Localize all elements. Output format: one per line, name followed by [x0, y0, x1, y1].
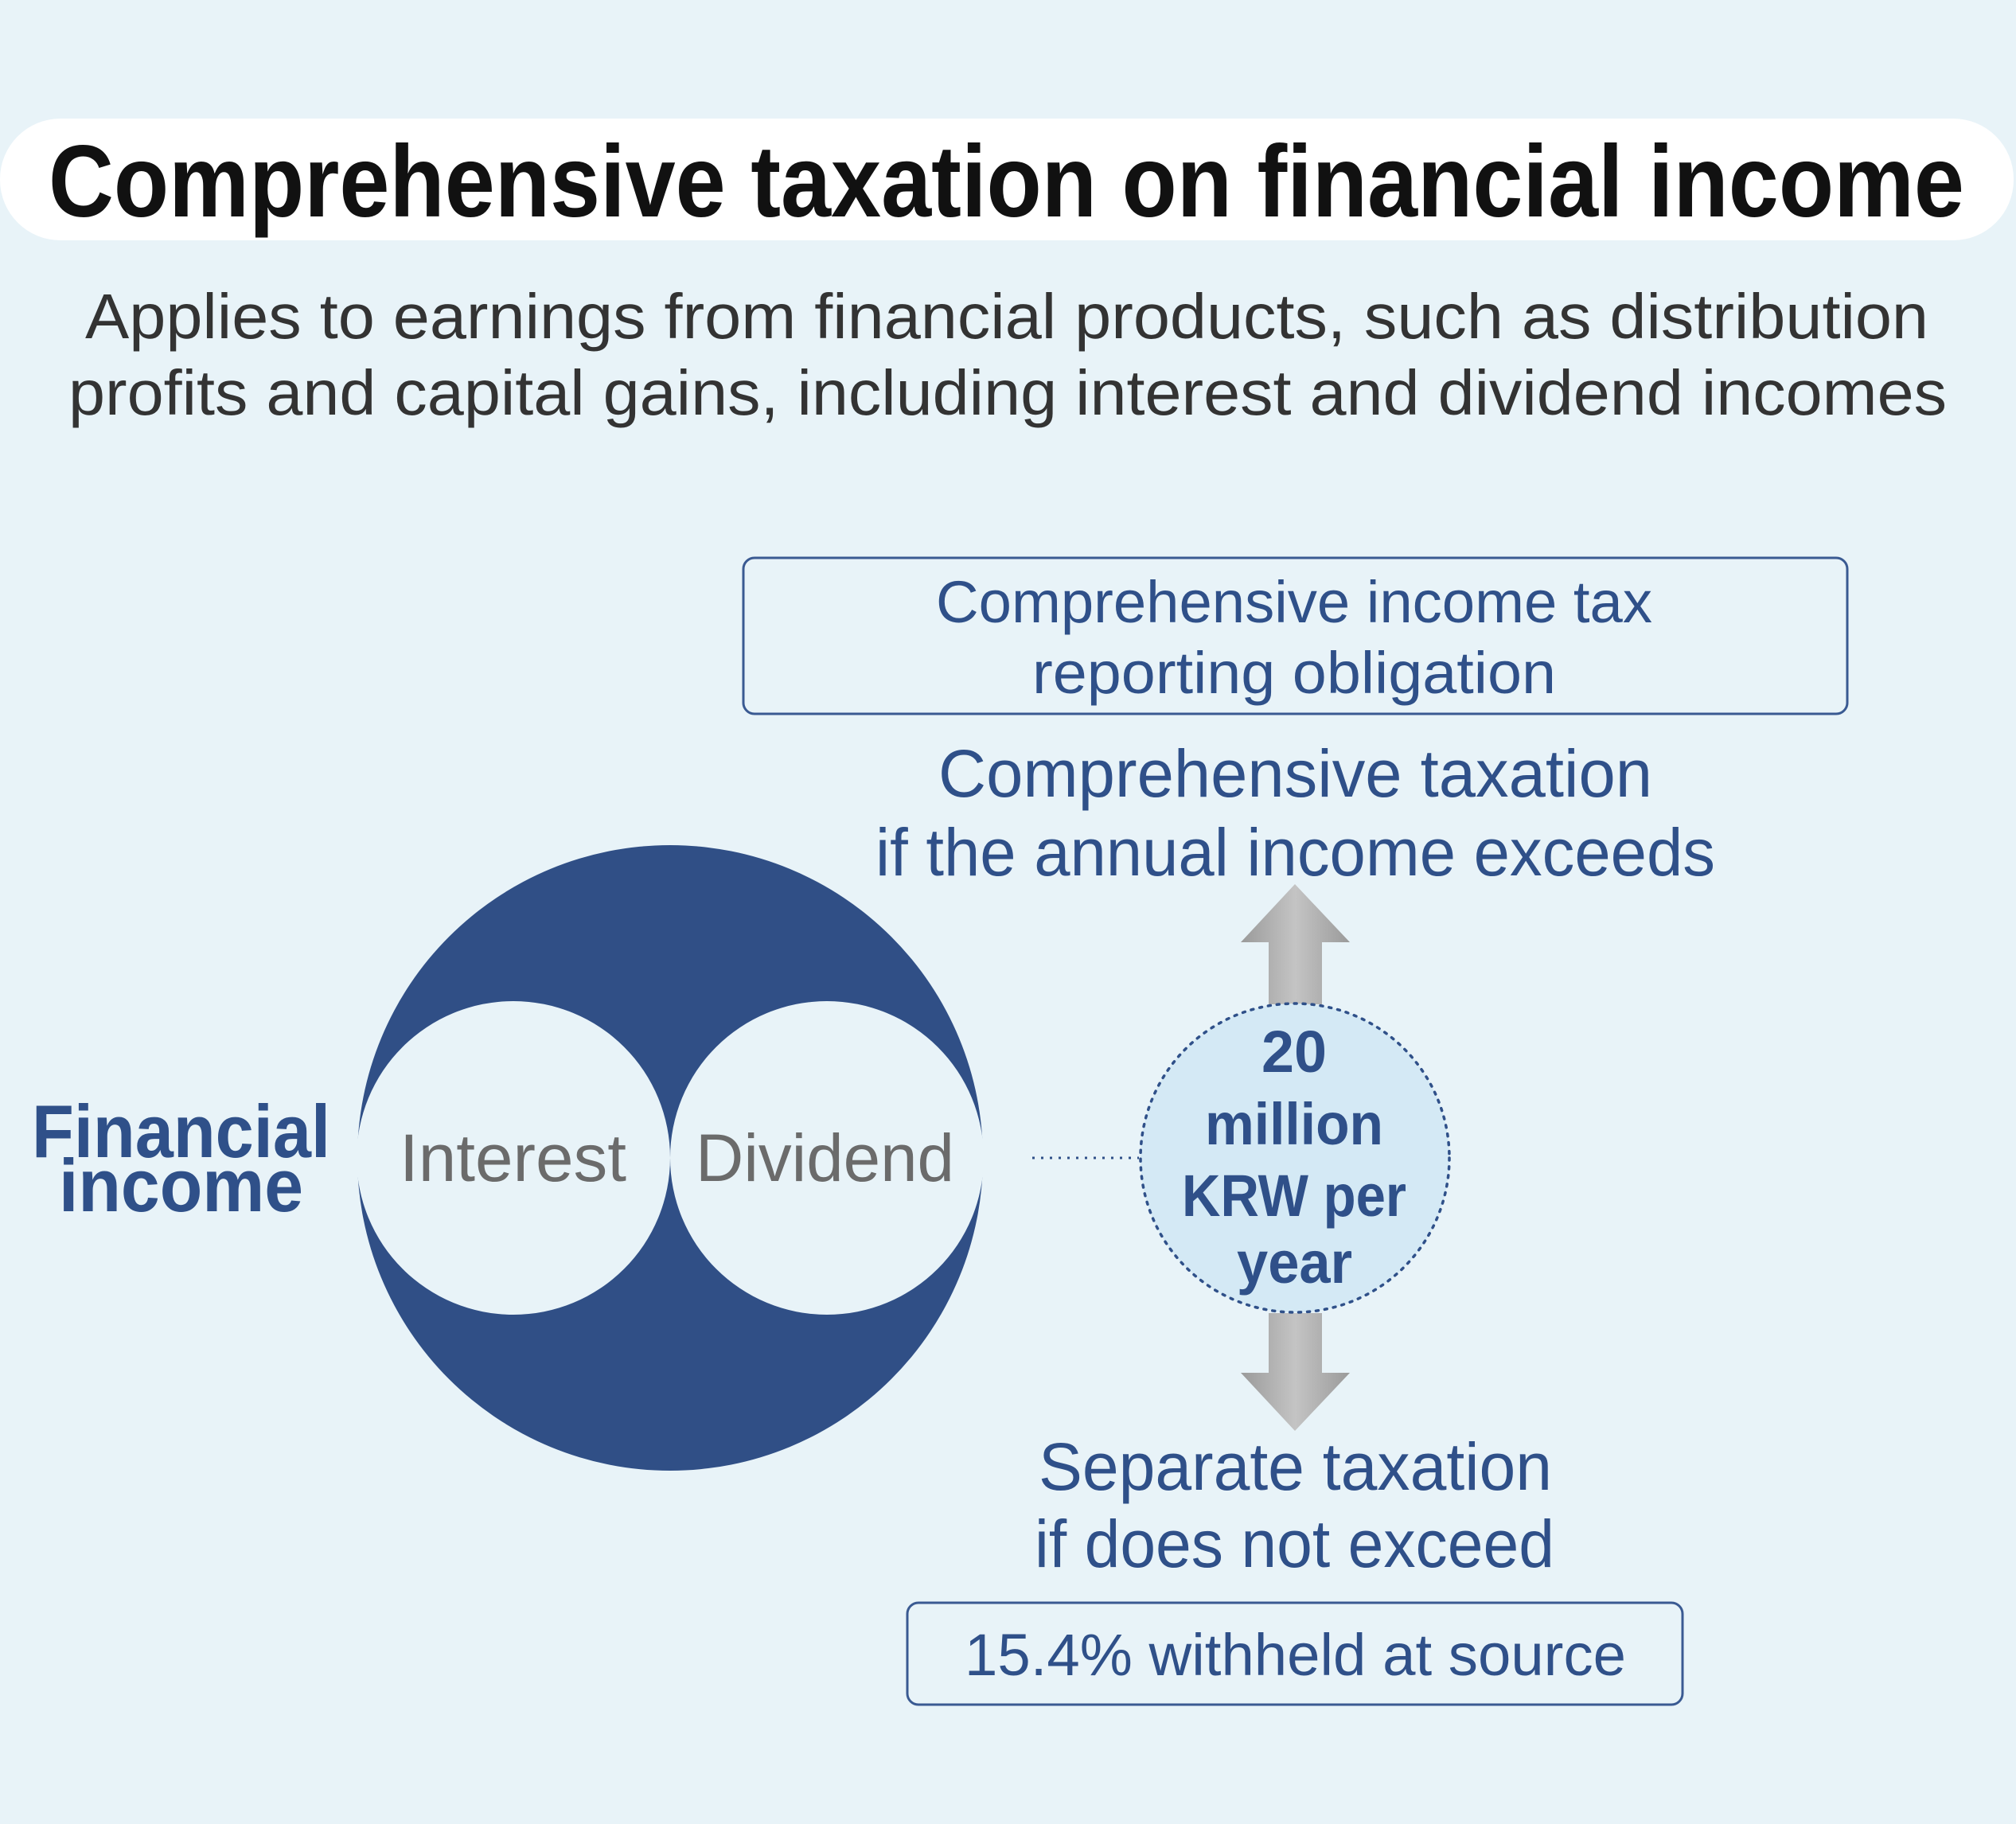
subtitle: profits and capital gains, including interest and dividend incomes [68, 357, 1947, 428]
circle: dividend: Dividend [696, 1121, 954, 1195]
box: reporting obligation: reporting obligation [1032, 640, 1556, 706]
box: withheld at source: 15.4% withheld at source [965, 1622, 1626, 1688]
subtitle: Applies to earnings from financial products, such as distribution [85, 281, 1928, 352]
label: financial income [32, 1089, 330, 1227]
label: financial income: income [59, 1144, 303, 1227]
threshold circle: KRW per [1182, 1163, 1406, 1229]
threshold circle: 20 [1261, 1019, 1327, 1085]
text: comprehensive taxation: if the annual income exceeds [875, 815, 1715, 890]
arrow: down [1241, 1313, 1350, 1431]
circle: interest [357, 1001, 670, 1315]
threshold circle: year [1237, 1230, 1352, 1296]
circle: dividend [670, 1001, 984, 1315]
threshold circle [1141, 1004, 1449, 1312]
label: financial income: Financial [32, 1089, 330, 1173]
circle: interest: Interest [400, 1121, 626, 1195]
box: reporting obligation [743, 558, 1847, 714]
text: comprehensive taxation [875, 736, 1715, 890]
box: withheld at source [907, 1603, 1683, 1705]
dotted connector [1032, 1157, 1139, 1159]
text: separate taxation: Separate taxation [1039, 1429, 1552, 1504]
arrow: up [1241, 884, 1350, 1004]
box: reporting obligation: Comprehensive income tax [936, 569, 1652, 635]
text: separate taxation [1035, 1429, 1554, 1581]
financial income circle diagram [357, 845, 984, 1471]
text: comprehensive taxation: Comprehensive taxation [938, 736, 1652, 811]
threshold circle: million [1205, 1091, 1383, 1157]
subtitle [68, 281, 1947, 428]
text: separate taxation: if does not exceed [1035, 1506, 1554, 1581]
